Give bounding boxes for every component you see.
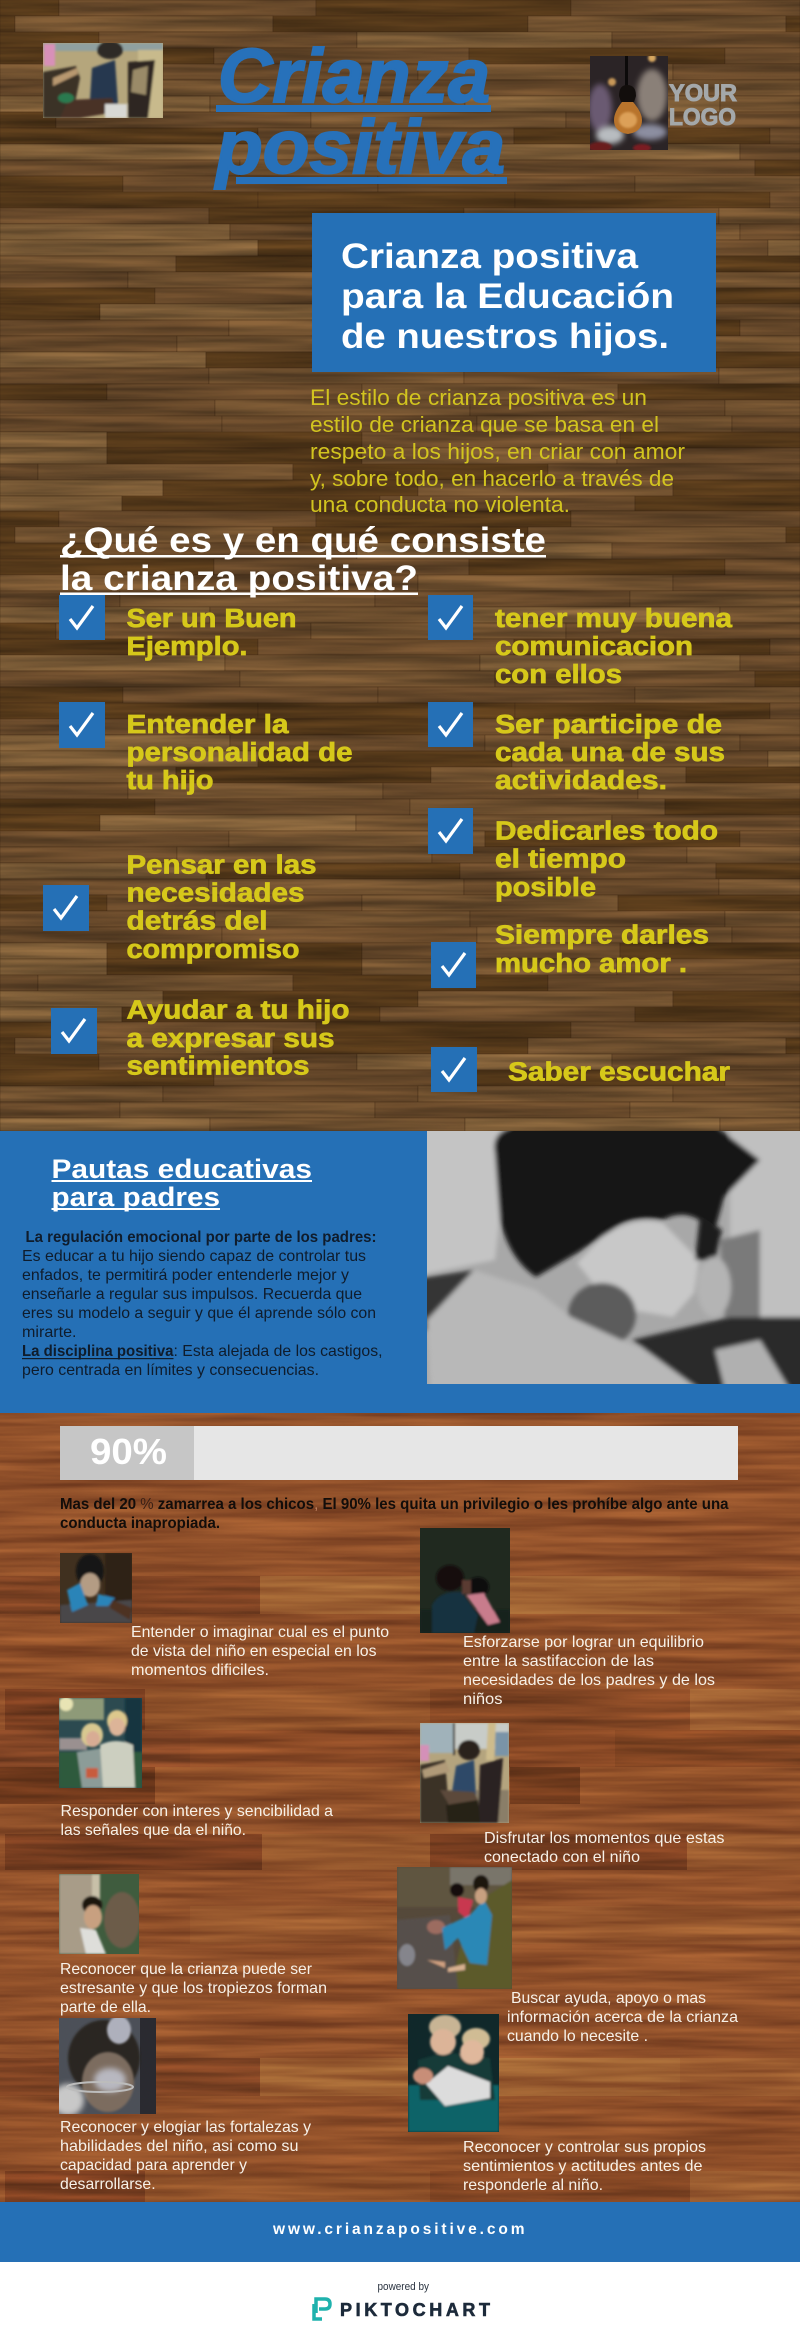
panel: blue intro heading: de nuestros hijos. — [341, 317, 669, 356]
background: dark wood floor — [0, 0, 800, 1131]
text: pautas body: pero centrada en límites y consecuencias. — [22, 1362, 319, 1379]
heading: what is positive parenting — [60, 521, 546, 598]
heading: pautas: para padres — [52, 1182, 220, 1212]
text: responder: Responder con interes y sencibilidad a — [60, 1803, 333, 1820]
text: buscar ayuda: información acerca de la crianza — [507, 2009, 738, 2026]
item: pensar en las necesidades — [43, 852, 316, 964]
item: dedicarles tiempo: Dedicarles todo — [495, 818, 718, 846]
text: entender — [131, 1624, 389, 1679]
item: dedicarles tiempo — [428, 808, 718, 902]
text: controlar sentimientos: responderle al niño. — [463, 2177, 603, 2194]
text: reconocer estresante: estresante y que los tropiezos forman — [60, 1980, 327, 1997]
item: saber escuchar — [431, 1047, 730, 1092]
text: pautas body — [22, 1229, 382, 1379]
stat text — [60, 1496, 729, 1532]
item: ser un buen ejemplo — [59, 595, 296, 661]
panel: blue intro heading: para la Educación — [341, 277, 674, 316]
text: disfrutar: Disfrutar los momentos que estas — [484, 1830, 724, 1847]
item: pensar en las necesidades: detrás del — [126, 908, 268, 936]
text: pautas body: enfados, te permitirá poder entenderle mejor y — [22, 1267, 349, 1284]
item: comunicacion — [428, 595, 733, 689]
photo: child at a desk — [43, 43, 163, 118]
item: ser un buen ejemplo: Ejemplo. — [126, 633, 248, 661]
intro paragraph: y, sobre todo, en hacerlo a través de — [310, 466, 674, 491]
intro paragraph: una conducta no violenta. — [310, 492, 570, 517]
photo: father and daughter — [420, 1528, 510, 1633]
text: disfrutar: conectado con el niño — [484, 1849, 640, 1866]
text: pautas body: La disciplina positiva — [22, 1343, 174, 1360]
item: comunicacion: tener muy buena — [495, 605, 733, 633]
item: entender personalidad: Entender la — [126, 711, 289, 739]
item: ser un buen ejemplo: Ser un Buen — [126, 605, 296, 633]
item: pensar en las necesidades: compromiso — [126, 936, 300, 964]
checklist — [43, 595, 733, 1092]
photo: girls by the river — [397, 1867, 512, 1989]
intro paragraph: estilo de crianza que se basa en el — [310, 412, 659, 437]
item: pensar en las necesidades: Pensar en las — [126, 852, 316, 880]
item: expresar sentimientos: a expresar sus — [126, 1025, 334, 1053]
item: dedicarles tiempo: posible — [495, 874, 596, 902]
text: reconocer estresante: Reconocer que la crianza puede ser — [60, 1961, 313, 1978]
text: elogiar: capacidad para aprender y — [60, 2157, 247, 2174]
text: entender: momentos dificiles. — [131, 1662, 269, 1679]
your logo placeholder: LOGO — [669, 104, 736, 131]
item: ser participe: actividades. — [495, 767, 667, 795]
photo: brothers with baby — [408, 2014, 499, 2132]
text: pautas body: La regulación emocional por parte de los padres: — [26, 1229, 376, 1246]
your logo placeholder: YOUR — [669, 80, 737, 107]
progress bar: 90 percent — [60, 1426, 738, 1480]
background: reddish wood floor — [0, 1413, 800, 2202]
white credit strip — [0, 2262, 800, 2342]
intro paragraph — [310, 385, 685, 517]
text: pautas body: Es educar a tu hijo siendo capaz de controlar tus — [22, 1248, 366, 1265]
photo: boy and bubbles — [59, 2018, 156, 2114]
item: ser participe: cada una de sus — [495, 739, 725, 767]
title: Crianza — [218, 34, 490, 119]
text: pautas body: : Esta alejada de los castigos, — [174, 1343, 382, 1360]
footer band with url: www.crianzapositive.com — [272, 2221, 524, 2238]
text: controlar sentimientos — [463, 2139, 706, 2194]
text: buscar ayuda — [507, 1990, 738, 2045]
item: entender personalidad — [59, 702, 352, 795]
piktochart credit — [314, 2281, 490, 2320]
panel: blue intro heading — [312, 213, 716, 372]
text: responder — [60, 1803, 333, 1839]
text: elogiar: Reconocer y elogiar las fortalezas y — [60, 2119, 311, 2136]
heading: pautas — [52, 1154, 312, 1212]
text: reconocer estresante: parte de ella. — [60, 1999, 151, 2016]
text: controlar sentimientos: Reconocer y controlar sus propios — [463, 2139, 706, 2156]
text: esforzarse: entre la sastifaccion de las — [463, 1653, 654, 1670]
panel: blue intro heading: Crianza positiva — [341, 237, 639, 276]
title: positiva — [214, 105, 505, 190]
photo: light bulb — [590, 56, 668, 150]
footer band with url — [0, 2202, 800, 2262]
your logo placeholder — [669, 80, 737, 131]
item: entender personalidad: tu hijo — [126, 767, 214, 795]
photo: girl in blue — [60, 1553, 132, 1623]
text: pautas body: enseñarle a regular sus impulsos. Recuerda que — [22, 1286, 362, 1303]
text: reconocer estresante — [60, 1961, 327, 2016]
heading: what is positive parenting: la crianza positiva? — [60, 559, 418, 598]
item: expresar sentimientos: Ayudar a tu hijo — [126, 996, 350, 1024]
text: pautas body: eres su modelo a seguir y que él aprende sólo con — [22, 1305, 376, 1322]
item: pensar en las necesidades: necesidades — [126, 880, 304, 908]
text: entender: Entender o imaginar cual es el punto — [131, 1624, 389, 1641]
panel: pautas educativas — [0, 1125, 800, 1413]
text: pautas body: mirarte. — [22, 1324, 76, 1341]
text: elogiar: habilidades del niño, asi como su — [60, 2138, 298, 2155]
heading: what is positive parenting: ¿Qué es y en qué consiste — [60, 521, 546, 560]
text: esforzarse — [463, 1634, 715, 1708]
item: entender personalidad: personalidad de — [126, 739, 352, 767]
text: esforzarse: necesidades de los padres y de los — [463, 1672, 715, 1689]
item: darles amor — [431, 922, 709, 988]
text: disfrutar — [484, 1830, 724, 1866]
item: darles amor: mucho amor . — [495, 950, 687, 978]
item: dedicarles tiempo: el tiempo — [495, 846, 626, 874]
text: controlar sentimientos: sentimientos y actitudes antes de — [463, 2158, 703, 2175]
piktochart credit: powered by — [378, 2281, 429, 2293]
item: comunicacion: comunicacion — [495, 633, 693, 661]
text: responder: las señales que da el niño. — [60, 1822, 246, 1839]
item: ser participe: Ser participe de — [495, 711, 722, 739]
piktochart credit: PIKTOCHART — [340, 2300, 490, 2320]
text: esforzarse: niños — [463, 1691, 502, 1708]
text: entender: de vista del niño en especial en los — [131, 1643, 376, 1660]
text: esforzarse: Esforzarse por lograr un equilibrio — [463, 1634, 704, 1651]
photo: child at table — [420, 1723, 509, 1823]
text: elogiar — [60, 2119, 311, 2193]
heading: pautas: Pautas educativas — [52, 1154, 312, 1184]
photo: child by tree — [59, 1874, 139, 1954]
stat text: conducta inapropiada. — [60, 1515, 220, 1532]
item: darles amor: Siempre darles — [495, 922, 709, 950]
item: ser participe — [428, 702, 725, 795]
icon: piktochart logo — [314, 2299, 330, 2319]
title — [214, 34, 507, 190]
item: comunicacion: con ellos — [495, 661, 622, 689]
intro paragraph: respeto a los hijos, en criar con amor — [310, 439, 685, 464]
intro paragraph: El estilo de crianza positiva es un — [310, 385, 647, 410]
progress bar: 90 percent: 90% — [90, 1431, 167, 1472]
text: buscar ayuda: Buscar ayuda, apoyo o mas — [511, 1990, 706, 2007]
item: expresar sentimientos: sentimientos — [126, 1052, 310, 1080]
item: saber escuchar: Saber escuchar — [508, 1058, 730, 1086]
text: buscar ayuda: cuando lo necesite . — [507, 2028, 648, 2045]
photo: two blond kids — [59, 1698, 142, 1788]
stat text: Mas del 20 % zamarrea a los chicos, El 90% les quita un privilegio o les prohíbe algo ante una — [60, 1496, 729, 1513]
text: elogiar: desarrollarse. — [60, 2176, 156, 2193]
item: expresar sentimientos — [51, 996, 350, 1080]
photo: sleeping child — [427, 1131, 800, 1384]
